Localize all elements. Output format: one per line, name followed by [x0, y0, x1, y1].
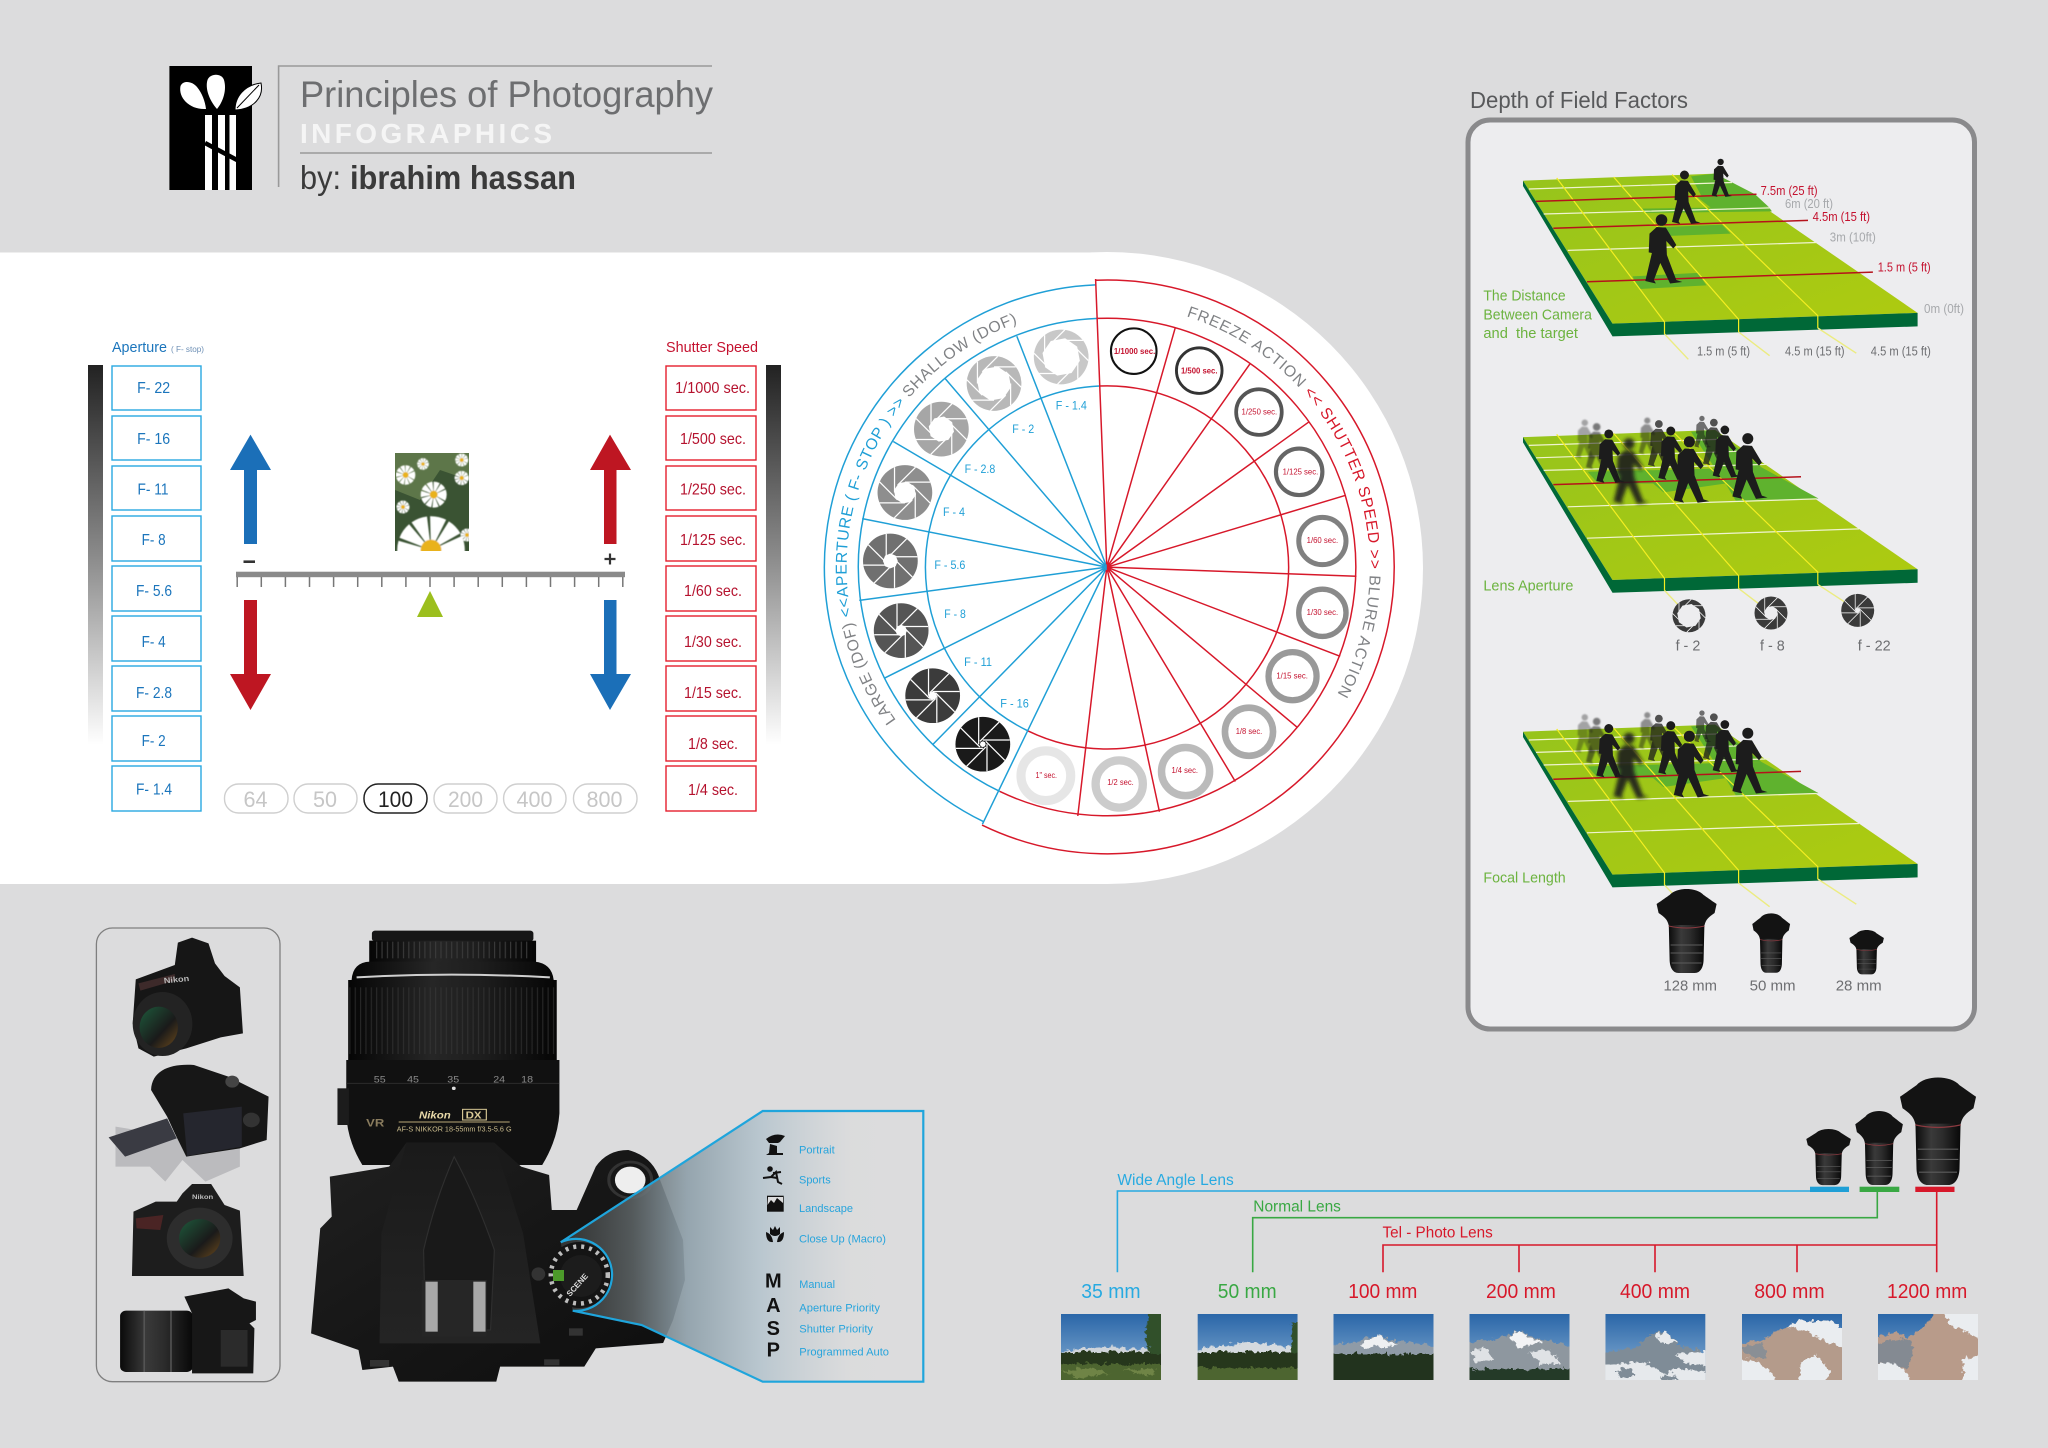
camera: front three-quarter with flash: Nikon — [163, 974, 190, 985]
pentaprism — [380, 1143, 540, 1343]
aperture heading: ( F- stop) — [171, 345, 204, 354]
distance scale labels: 4.5 m (15 ft) — [1785, 344, 1845, 358]
factor label: distance — [1483, 288, 1593, 342]
mode names: Manual — [799, 1279, 835, 1291]
photo: 100 mm — [1334, 1314, 1434, 1380]
focal length values: 50 mm — [1218, 1281, 1277, 1303]
panel frame — [1468, 120, 1974, 1029]
shutter speed ring labels: 1/15 sec. — [1276, 671, 1308, 681]
factor label: distance: Between Camera — [1483, 306, 1593, 323]
focal length values: 400 mm — [1620, 1281, 1690, 1303]
header title block: INFOGRAPHICS — [300, 118, 552, 149]
ISO pills: 400 — [516, 787, 552, 812]
lens examples: 50 mm — [1750, 978, 1796, 995]
mode letters — [765, 1271, 782, 1362]
aperture irises — [863, 330, 1089, 772]
distance scale labels: 7.5m (25 ft) — [1761, 184, 1818, 198]
exposure meter scale — [236, 554, 625, 587]
focal length values — [1081, 1281, 1967, 1303]
shutter speed ring labels: 1/125 sec. — [1283, 467, 1318, 477]
shutter column: 1/15 sec. — [684, 685, 742, 702]
shutter speed ring labels: 1/1000 sec. — [1114, 346, 1155, 356]
ISO pills — [224, 784, 637, 813]
icon: macro flower — [766, 1226, 784, 1242]
right gradient bar — [766, 365, 781, 745]
mode names — [799, 1144, 889, 1359]
lens: Nikon — [419, 1110, 451, 1121]
lens colour keys — [1810, 1187, 1954, 1192]
red spokes — [1078, 279, 1356, 816]
wide angle connector: Wide Angle Lens — [1117, 1172, 1234, 1189]
lens markings: 45 — [407, 1075, 419, 1085]
normal lens connector: Normal Lens — [1253, 1199, 1341, 1216]
shutter column: 1/500 sec. — [680, 431, 746, 448]
distance scale labels: 4.5 m (15 ft) — [1871, 344, 1931, 358]
diagram: lens aperture board — [1523, 416, 1918, 616]
mode letters: S — [767, 1318, 780, 1340]
focal length values: 35 mm — [1081, 1281, 1141, 1303]
shutter button — [609, 1162, 652, 1198]
logo — [169, 66, 262, 190]
aperture column: F- 11 — [138, 482, 169, 499]
factor label: lens aperture: Lens Aperture — [1483, 578, 1573, 595]
distance scale labels: 4.5m (15 ft) — [1813, 210, 1870, 224]
distance scale labels: 1.5 m (5 ft) — [1697, 344, 1750, 358]
factor label: distance: The Distance — [1483, 288, 1566, 305]
shutter column: 1/1000 sec. — [675, 380, 750, 397]
normal lens connector — [1253, 1192, 1877, 1272]
shutter speed ring labels: 1" sec. — [1035, 770, 1057, 780]
arrow: aperture up — [230, 435, 271, 544]
arrow: shutter down — [590, 600, 631, 710]
arrow: aperture down — [230, 600, 271, 710]
focal length values: 200 mm — [1486, 1281, 1556, 1303]
telephoto connector — [1382, 1192, 1937, 1272]
header title block: Principles of Photography — [300, 74, 713, 115]
aperture heading: Aperture — [112, 339, 167, 356]
f-stop labels: F - 2.8 — [965, 463, 995, 476]
shutter speed ring labels: 1/30 sec. — [1307, 607, 1338, 617]
aperture column: F- 16 — [137, 431, 170, 448]
header title block: by: — [300, 159, 341, 196]
aperture examples: f - 8 — [1760, 638, 1785, 655]
blue spokes — [859, 336, 1107, 824]
shutter column: 1/250 sec. — [680, 482, 746, 499]
aperture examples — [1672, 594, 1891, 655]
photo: 800 mm — [1742, 1314, 1842, 1380]
diagram: focal length board — [1523, 710, 1918, 910]
camera: front three-quarter with flash — [133, 938, 243, 1057]
curved label: aperture: LARGE (DOF) <<APERTURE ( F- STOP ) >> SHALLOW (DOF) — [836, 314, 1016, 726]
f-stop labels: F - 1.4 — [1056, 400, 1087, 413]
ISO pills: 50 — [313, 787, 337, 812]
shutter column: 1/60 sec. — [684, 583, 742, 600]
wheel ring outlines — [824, 280, 1394, 854]
shutter speed ring labels: 1/250 sec. — [1242, 407, 1277, 417]
callout outline — [561, 1111, 923, 1382]
mode names: Landscape — [799, 1203, 853, 1215]
shutter column: 1/125 sec. — [680, 532, 746, 549]
ISO pills: 100 — [378, 787, 413, 812]
left gradient bar — [88, 365, 103, 745]
lens: DX — [466, 1110, 482, 1121]
f-stop labels: F - 11 — [964, 656, 992, 669]
shutter column: 1/8 sec. — [688, 736, 738, 753]
panel: camera angles — [96, 928, 280, 1382]
factor label: focal length: Focal Length — [1483, 869, 1566, 886]
icon: portrait — [766, 1135, 785, 1155]
lens markings: 35 — [447, 1075, 460, 1085]
header title block: ibrahim hassan — [350, 159, 576, 196]
mode names: Aperture Priority — [799, 1303, 880, 1315]
lens markings: 55 — [374, 1075, 386, 1085]
distance scale labels: 0m (0ft) — [1924, 302, 1964, 316]
aperture examples: f - 2 — [1676, 638, 1700, 655]
wide angle connector — [1117, 1172, 1810, 1272]
camera: side view — [120, 1288, 256, 1373]
aperture column: F- 22 — [137, 380, 170, 397]
f-stop labels: F - 2 — [1012, 423, 1034, 436]
shutter speed ring labels — [1035, 346, 1338, 787]
aperture column: F- 1.4 — [136, 782, 172, 799]
mode dial — [546, 1242, 612, 1308]
photo: 400 mm — [1605, 1314, 1706, 1380]
shutter speed ring labels: 1/8 sec. — [1236, 726, 1262, 736]
aperture examples: f - 22 — [1858, 638, 1891, 655]
curved label: shutter speed: FREEZE ACTION << SHUTTER SPEED >> BLURE ACTION — [1188, 306, 1380, 698]
callout: mode dial explainer — [546, 1111, 923, 1382]
lens markings: 24 — [493, 1075, 506, 1085]
shutter speed heading: Shutter Speed — [666, 339, 758, 356]
mode dial: SCENE — [565, 1271, 590, 1298]
lens group — [1806, 1078, 1976, 1185]
focal length values: 1200 mm — [1887, 1281, 1967, 1303]
shutter speed ring labels: 1/4 sec. — [1171, 765, 1198, 775]
distance scale labels: 6m (20 ft) — [1785, 197, 1833, 211]
camera: rear with flip screen — [109, 1065, 269, 1182]
focal length values: 100 mm — [1348, 1281, 1417, 1303]
camera: front view — [132, 1184, 244, 1276]
icon: landscape — [767, 1196, 784, 1212]
grip detail — [370, 1267, 583, 1367]
mode letters: A — [766, 1295, 781, 1317]
distance scale labels — [1697, 184, 1964, 358]
chart: aperture and shutter wheel — [824, 279, 1395, 855]
aperture column: F- 8 — [142, 532, 166, 549]
panel heading: Depth of Field Factors — [1470, 87, 1688, 113]
mode letters: P — [767, 1340, 780, 1362]
callout panel — [561, 1111, 923, 1382]
hot shoe — [422, 1280, 487, 1337]
mode names: Programmed Auto — [799, 1347, 889, 1359]
f-stop labels: F - 8 — [944, 608, 966, 621]
aperture heading — [112, 339, 204, 356]
photo: daisies — [395, 453, 469, 551]
f-stop labels: F - 16 — [1000, 697, 1029, 710]
lens: VR — [366, 1116, 384, 1129]
header title block — [279, 66, 713, 196]
factor label: distance: and the target — [1483, 325, 1579, 342]
ISO pills: 64 — [244, 787, 268, 812]
diagram: camera distance board — [1523, 159, 1918, 359]
meter pointer — [417, 591, 443, 617]
lens markings: 18 — [521, 1075, 534, 1085]
icon: sports — [763, 1167, 782, 1184]
camera: front view: Nikon — [192, 1193, 213, 1201]
aperture column: F- 5.6 — [136, 583, 172, 600]
ISO pills: 800 — [586, 787, 622, 812]
mode names: Sports — [799, 1174, 831, 1186]
lens examples — [1657, 889, 1884, 995]
lens — [337, 931, 559, 1165]
panel: depth of field factors — [1468, 87, 1974, 1029]
lens: AF-S NIKKOR 18-55mm f/3.5-5.6 G — [397, 1125, 512, 1133]
lens examples: 128 mm — [1664, 978, 1717, 995]
main camera top view — [311, 931, 685, 1382]
telephoto connector: Tel - Photo Lens — [1382, 1224, 1493, 1241]
wheel hub — [1104, 564, 1110, 570]
shutter speed rings — [1021, 328, 1346, 808]
arrow: shutter up — [590, 435, 631, 544]
f-stop labels — [934, 400, 1087, 710]
aperture column: F- 2.8 — [136, 685, 172, 702]
shutter column — [666, 366, 756, 811]
camera body — [311, 1143, 685, 1382]
focal length values: 800 mm — [1754, 1281, 1825, 1303]
mode names: Shutter Priority — [799, 1323, 874, 1335]
shutter column: 1/30 sec. — [684, 634, 742, 651]
f-stop labels: F - 5.6 — [934, 559, 965, 572]
panel frame — [96, 928, 280, 1382]
shutter speed ring labels: 1/2 sec. — [1107, 777, 1134, 787]
photo: 1200 mm — [1878, 1314, 1978, 1380]
panel: exposure triangle — [88, 339, 781, 813]
photo: 35 mm — [1061, 1314, 1161, 1380]
mode names: Close Up (Macro) — [799, 1233, 886, 1245]
aperture column — [112, 366, 201, 811]
lens markings — [374, 1075, 534, 1090]
f-stop labels: F - 4 — [943, 506, 966, 519]
mode letters: M — [765, 1271, 782, 1293]
aperture column: F- 4 — [142, 634, 166, 651]
mode names: Portrait — [799, 1144, 835, 1156]
white band with circular end — [0, 252, 1423, 884]
shutter speed ring labels: 1/500 sec. — [1181, 366, 1217, 376]
ISO pills: 200 — [448, 787, 483, 812]
distance scale labels: 3m (10ft) — [1830, 230, 1876, 244]
shutter speed ring labels: 1/60 sec. — [1307, 535, 1338, 545]
photo: 200 mm — [1470, 1314, 1570, 1380]
aperture column: F- 2 — [142, 733, 166, 750]
distance scale labels: 1.5 m (5 ft) — [1878, 260, 1931, 274]
shutter column: 1/4 sec. — [688, 782, 738, 799]
lens examples: 28 mm — [1836, 978, 1882, 995]
panel: focal length comparison — [1051, 1078, 1988, 1390]
photo: 50 mm — [1198, 1314, 1298, 1380]
